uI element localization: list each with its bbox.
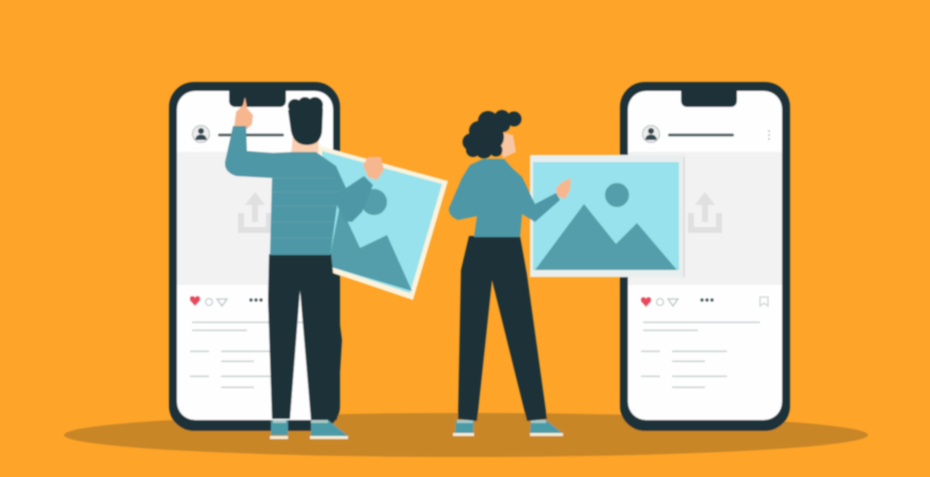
upload icon (238, 192, 272, 233)
upload icon (688, 192, 722, 233)
picture mountains (328, 205, 412, 291)
woman right shoe (530, 420, 563, 436)
woman trousers (458, 236, 547, 421)
ground shadow (64, 413, 868, 457)
sweater stripes (271, 178, 338, 238)
woman hand (556, 178, 571, 199)
phone: left (169, 82, 340, 431)
picture frame (530, 155, 685, 277)
woman face (499, 132, 516, 158)
man right shoe (310, 420, 348, 439)
picture frame shadow (683, 157, 685, 277)
phone screen (177, 91, 333, 420)
notch (229, 88, 286, 107)
scene (64, 82, 868, 457)
reaction icons (641, 297, 768, 307)
username line (218, 134, 284, 136)
man sweater (225, 126, 373, 255)
phone body (169, 82, 340, 431)
picture frame (316, 145, 448, 300)
menu dots (768, 130, 770, 140)
picture sun (361, 189, 387, 215)
man left shoe (270, 420, 288, 439)
photo placeholder band (628, 152, 782, 285)
woman sweater (449, 159, 560, 237)
man trousers (268, 254, 342, 420)
man raised hand (234, 97, 253, 130)
username line (668, 134, 734, 136)
profile avatar (642, 126, 660, 142)
flat picture held by woman (530, 155, 685, 277)
phone screen (628, 91, 782, 420)
picture sun (605, 183, 629, 207)
man hair (288, 97, 323, 145)
picture sky (322, 151, 442, 293)
phone body (620, 82, 790, 431)
man (225, 97, 384, 439)
reaction icons (190, 296, 263, 306)
phone: right (620, 82, 790, 431)
man neck (291, 135, 319, 155)
tilted picture held by man (316, 145, 448, 300)
notch (681, 88, 737, 107)
man other hand (363, 157, 384, 180)
woman left shoe (453, 420, 474, 436)
picture mountains (535, 204, 677, 270)
woman hair (462, 110, 522, 158)
profile avatar (192, 126, 210, 142)
picture sky (533, 162, 679, 270)
caption lines (641, 322, 760, 388)
woman (449, 110, 571, 436)
photo placeholder band (177, 152, 333, 285)
caption lines (190, 322, 309, 388)
